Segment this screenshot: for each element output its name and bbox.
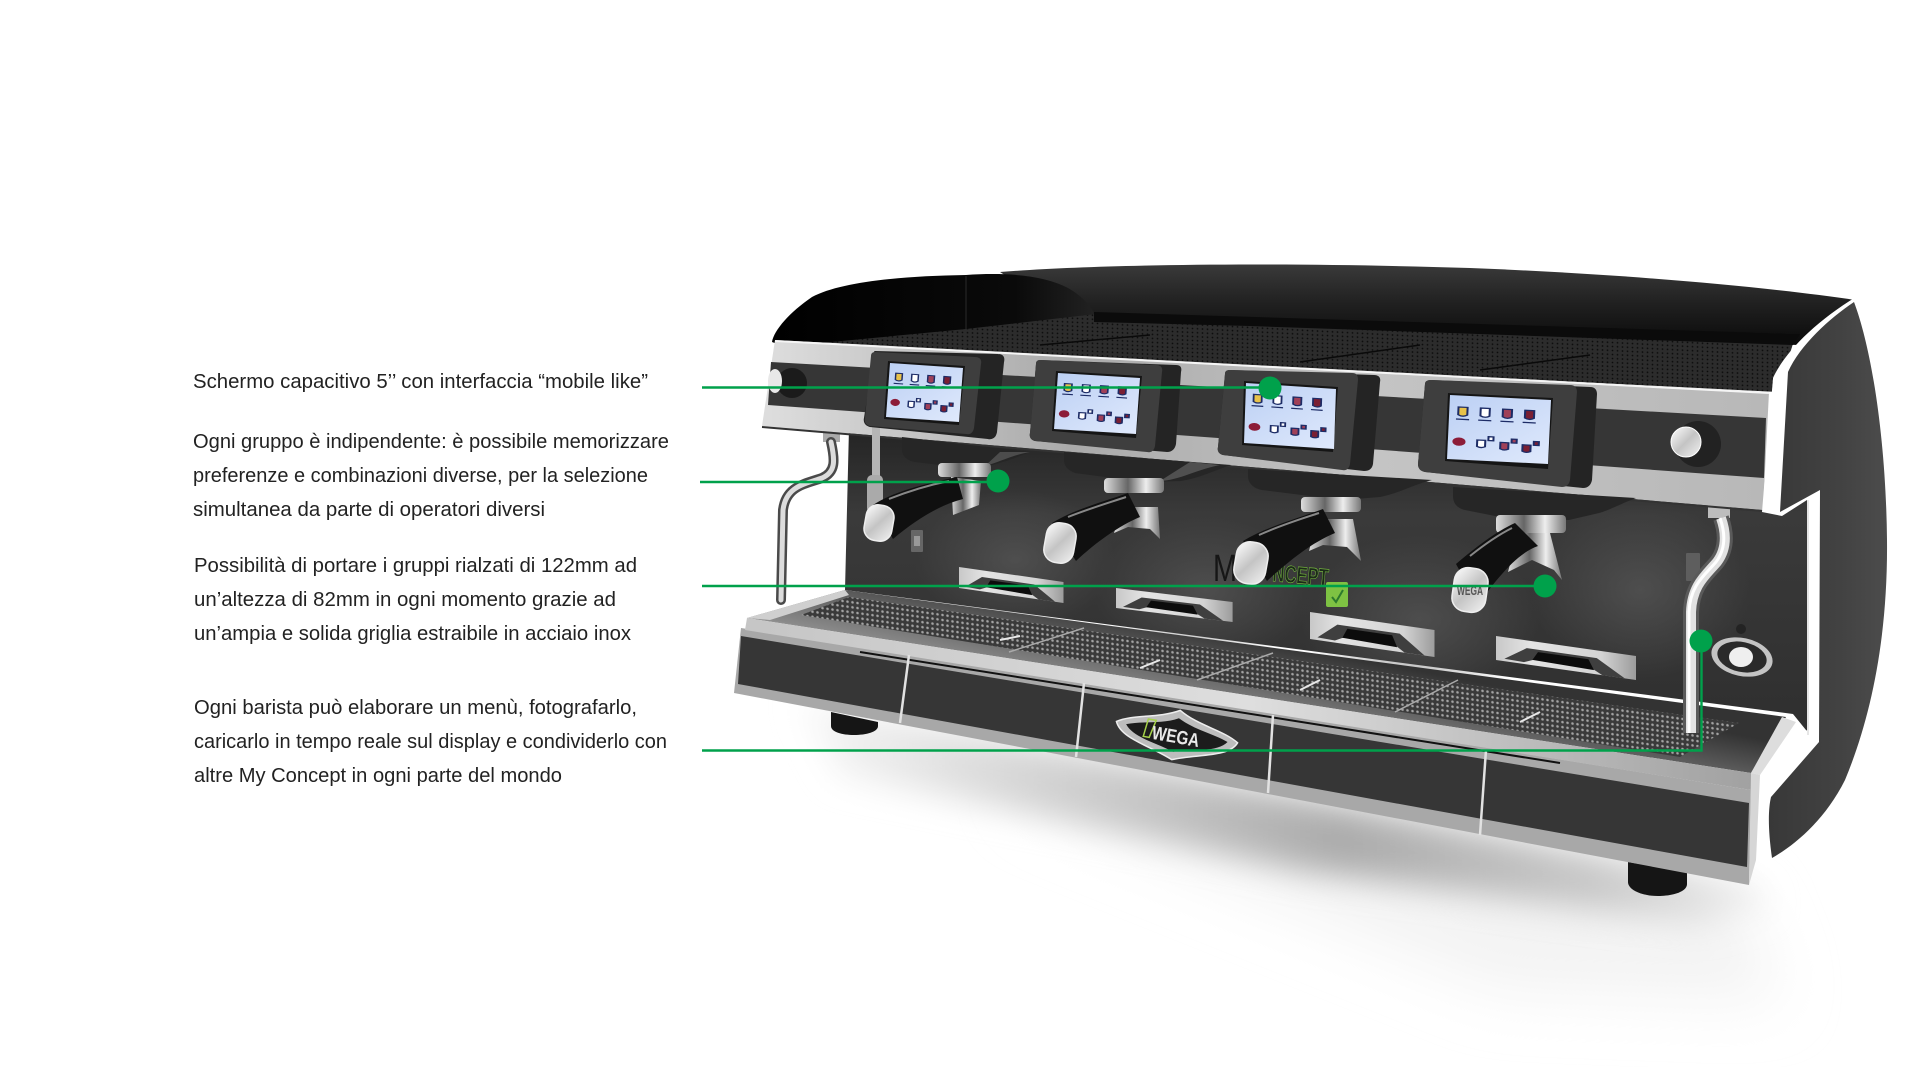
drip tray top: [747, 590, 1796, 775]
right knob: [1675, 421, 1721, 467]
display 1: [865, 352, 1003, 438]
display 4: [1418, 380, 1597, 488]
left knob: [777, 368, 807, 398]
hood: top back panel: [1000, 265, 1855, 345]
My Concept logo on plate: M: [1213, 548, 1237, 590]
portafilter 4: [1450, 515, 1566, 614]
back plate: [845, 428, 1810, 735]
My Concept logo on plate: [1213, 548, 1348, 607]
screen 3: [1244, 383, 1336, 449]
Wega badge: WEGA: [1150, 723, 1201, 752]
callout line and dot: raised groups: [702, 574, 1556, 598]
floor reflection shadow: [800, 700, 1780, 1000]
green badge: [1326, 582, 1348, 607]
steam wand left: [781, 430, 840, 600]
feet: [831, 712, 1687, 896]
cup warmer grate: [775, 314, 1796, 392]
screen 2: [1054, 373, 1140, 434]
text: independent groups: preferenze e combinazioni diverse, per la selezione: [193, 464, 648, 487]
drawer separators: [900, 655, 1486, 835]
text: menu sharing: caricarlo in tempo reale sul display e condividerlo con: [194, 730, 667, 753]
text: independent groups: Ogni gruppo è indipendente: è possibile memorizzare: [193, 430, 669, 453]
tray handle 1: [959, 567, 1064, 603]
side switches: [911, 530, 1700, 581]
text: raised groups: un’altezza di 82mm in ogni momento grazie ad: [194, 588, 616, 611]
espresso machine: [734, 265, 1887, 896]
Wega badge: [1112, 700, 1241, 770]
front drawer: [734, 618, 1760, 885]
text: touchscreen: Schermo capacitivo 5’’ con interfaccia “mobile like”: [193, 370, 648, 393]
text: independent groups: [193, 430, 669, 521]
text: raised groups: [194, 554, 637, 645]
display 3: [1218, 370, 1380, 471]
tray handle 4: [1496, 636, 1636, 680]
group 3 head: [1248, 469, 1432, 500]
header band: [762, 340, 1769, 511]
plate light spots: [915, 490, 1750, 705]
group 1 head: [902, 437, 1030, 468]
text: menu sharing: altre My Concept in ogni parte del mondo: [194, 764, 562, 787]
callout line and dot: display: [702, 376, 1282, 400]
portafilter 1: [862, 427, 991, 543]
callout line and dot: independent group: [700, 470, 1010, 492]
hood: left raised bump: [772, 274, 1096, 345]
text: raised groups: un’ampia e solida griglia estraibile in acciaio inox: [194, 622, 632, 645]
text: raised groups: Possibilità di portare i gruppi rialzati di 122mm ad: [194, 554, 637, 577]
text: independent groups: simultanea da parte di operatori diversi: [193, 498, 545, 521]
tray handle 2: [1116, 588, 1233, 622]
group 4 head: [1453, 487, 1636, 520]
steam wand right: [1689, 502, 1730, 733]
text: menu sharing: Ogni barista può elaborare un menù, fotografarlo,: [194, 696, 637, 719]
portafilter 4: WEGA: [1457, 583, 1483, 598]
tray handle 3: [1310, 612, 1434, 657]
gauge: [1708, 624, 1776, 682]
My Concept logo on plate: NCEPT: [1271, 560, 1330, 592]
screen 4: [1447, 395, 1551, 464]
front corner chrome: [1749, 773, 1760, 885]
callout line and dot: menu sharing: [702, 630, 1712, 750]
group 2 head: [1064, 452, 1231, 482]
display 2: [1030, 360, 1181, 452]
portafilter 2: [1042, 478, 1164, 565]
right side panel: [1755, 297, 1887, 860]
text: menu sharing: [194, 696, 667, 787]
portafilter 3: [1232, 497, 1361, 586]
screen 1: [886, 363, 963, 422]
